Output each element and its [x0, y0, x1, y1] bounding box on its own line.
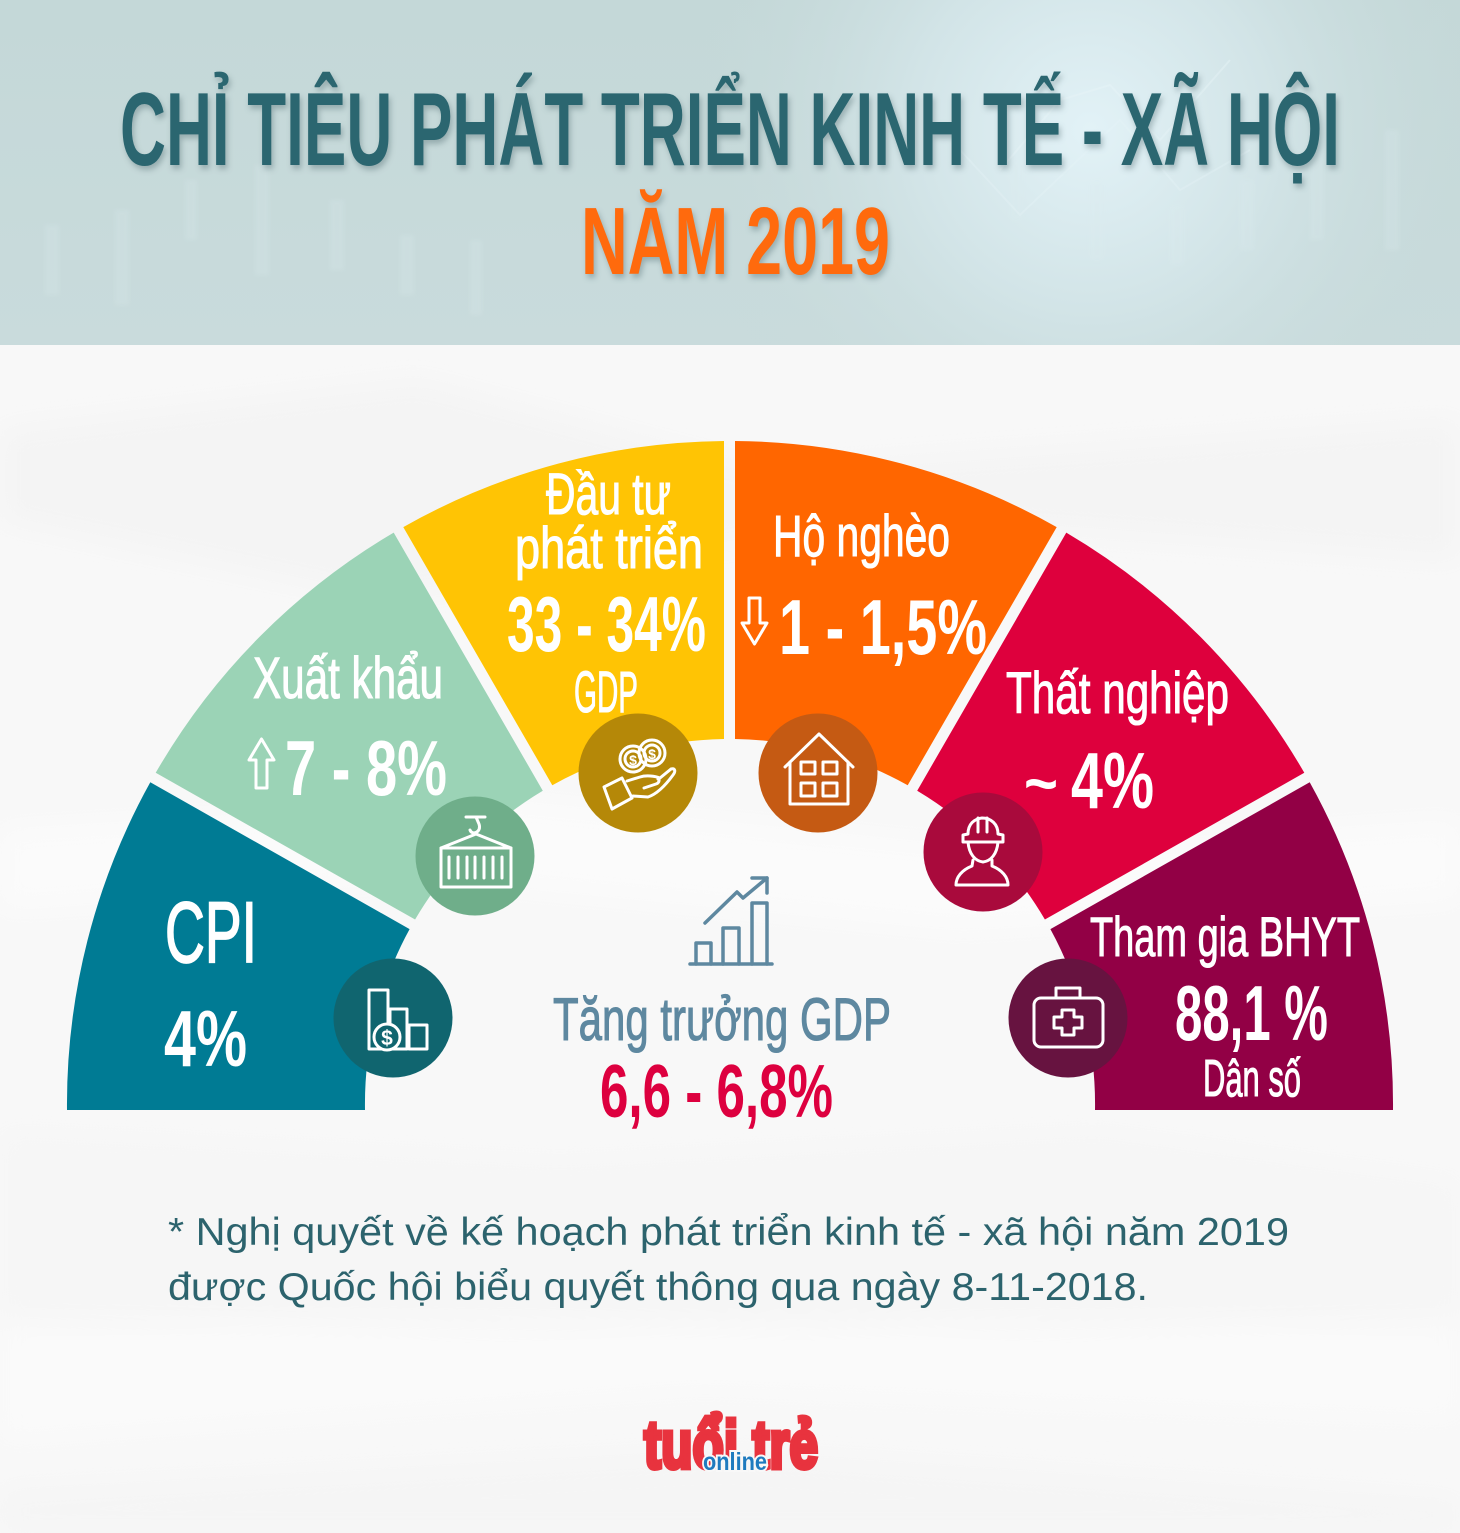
segment: Xuất khẩu — [156, 533, 543, 920]
icon: shipping container — [416, 796, 534, 916]
Đầu tư phát triển label: Đầu tư — [546, 462, 671, 527]
segment: Thất nghiệp — [917, 533, 1304, 920]
title line 2: NĂM 2019 — [581, 188, 890, 295]
GDP value: 6,6 - 6,8% — [600, 1049, 833, 1133]
Đầu tư phát triển label: GDP — [574, 660, 638, 725]
Đầu tư phát triển label: phát triển — [515, 516, 703, 581]
CPI label: CPI — [165, 885, 257, 981]
icon: CPI bars with dollar coin — [334, 958, 452, 1078]
icon: hand with coins — [578, 714, 698, 832]
Đầu tư phát triển label: 33 - 34% — [507, 580, 706, 668]
icon: down arrow — [742, 598, 767, 644]
Xuất khẩu label: 7 - 8% — [285, 724, 447, 812]
paper background — [0, 345, 1460, 1533]
footnote — [168, 1211, 1289, 1309]
icon: up arrow — [249, 739, 274, 788]
footnote: * Nghị quyết về kế hoạch phát triển kinh tế - xã hội năm 2019 — [168, 1211, 1289, 1254]
Hộ nghèo label: 1 - 1,5% — [779, 583, 987, 671]
icon: CPI bars with dollar coin: $ — [381, 1027, 393, 1050]
semicircle chart — [67, 441, 1393, 1110]
icon: medical kit — [1008, 958, 1128, 1078]
Tham gia BHYT label: 88,1 % — [1175, 969, 1328, 1057]
Thất nghiệp label: 4% — [1071, 736, 1154, 825]
icon: worker with helmet — [924, 792, 1042, 912]
title — [120, 71, 1340, 295]
footnote: được Quốc hội biểu quyết thông qua ngày 8-11-2018. — [168, 1266, 1148, 1309]
Tham gia BHYT label: Dân số — [1203, 1050, 1301, 1108]
segment: Hộ nghèo — [735, 441, 1057, 785]
segment: Đầu tư phát triển — [403, 441, 724, 785]
icon: hand with coins: $ — [648, 746, 656, 762]
Hộ nghèo label — [742, 504, 987, 671]
Đầu tư phát triển label — [507, 462, 706, 725]
Xuất khẩu label — [249, 646, 447, 812]
icon: house — [758, 714, 878, 832]
icon: growth chart — [690, 878, 772, 964]
Thất nghiệp label: ~ — [1024, 747, 1058, 819]
Tham gia BHYT label — [1090, 905, 1360, 1108]
logo: Tuổi Trẻ Online: tuổi trẻ — [644, 1407, 818, 1483]
centre GDP block — [553, 878, 891, 1133]
logo: Tuổi Trẻ Online: online — [703, 1448, 767, 1476]
GDP label: Tăng trưởng GDP — [553, 986, 891, 1053]
CPI label — [164, 885, 257, 1083]
segment: CPI — [67, 782, 410, 1110]
Thất nghiệp label — [1006, 661, 1229, 825]
CPI label: 4% — [164, 994, 247, 1083]
Hộ nghèo label: Hộ nghèo — [773, 504, 950, 569]
Thất nghiệp label: Thất nghiệp — [1006, 661, 1229, 726]
segment: Tham gia BHYT — [1050, 782, 1393, 1110]
icon: hand with coins: $ — [629, 752, 637, 768]
Xuất khẩu label: Xuất khẩu — [253, 646, 443, 711]
header background — [0, 0, 1460, 345]
